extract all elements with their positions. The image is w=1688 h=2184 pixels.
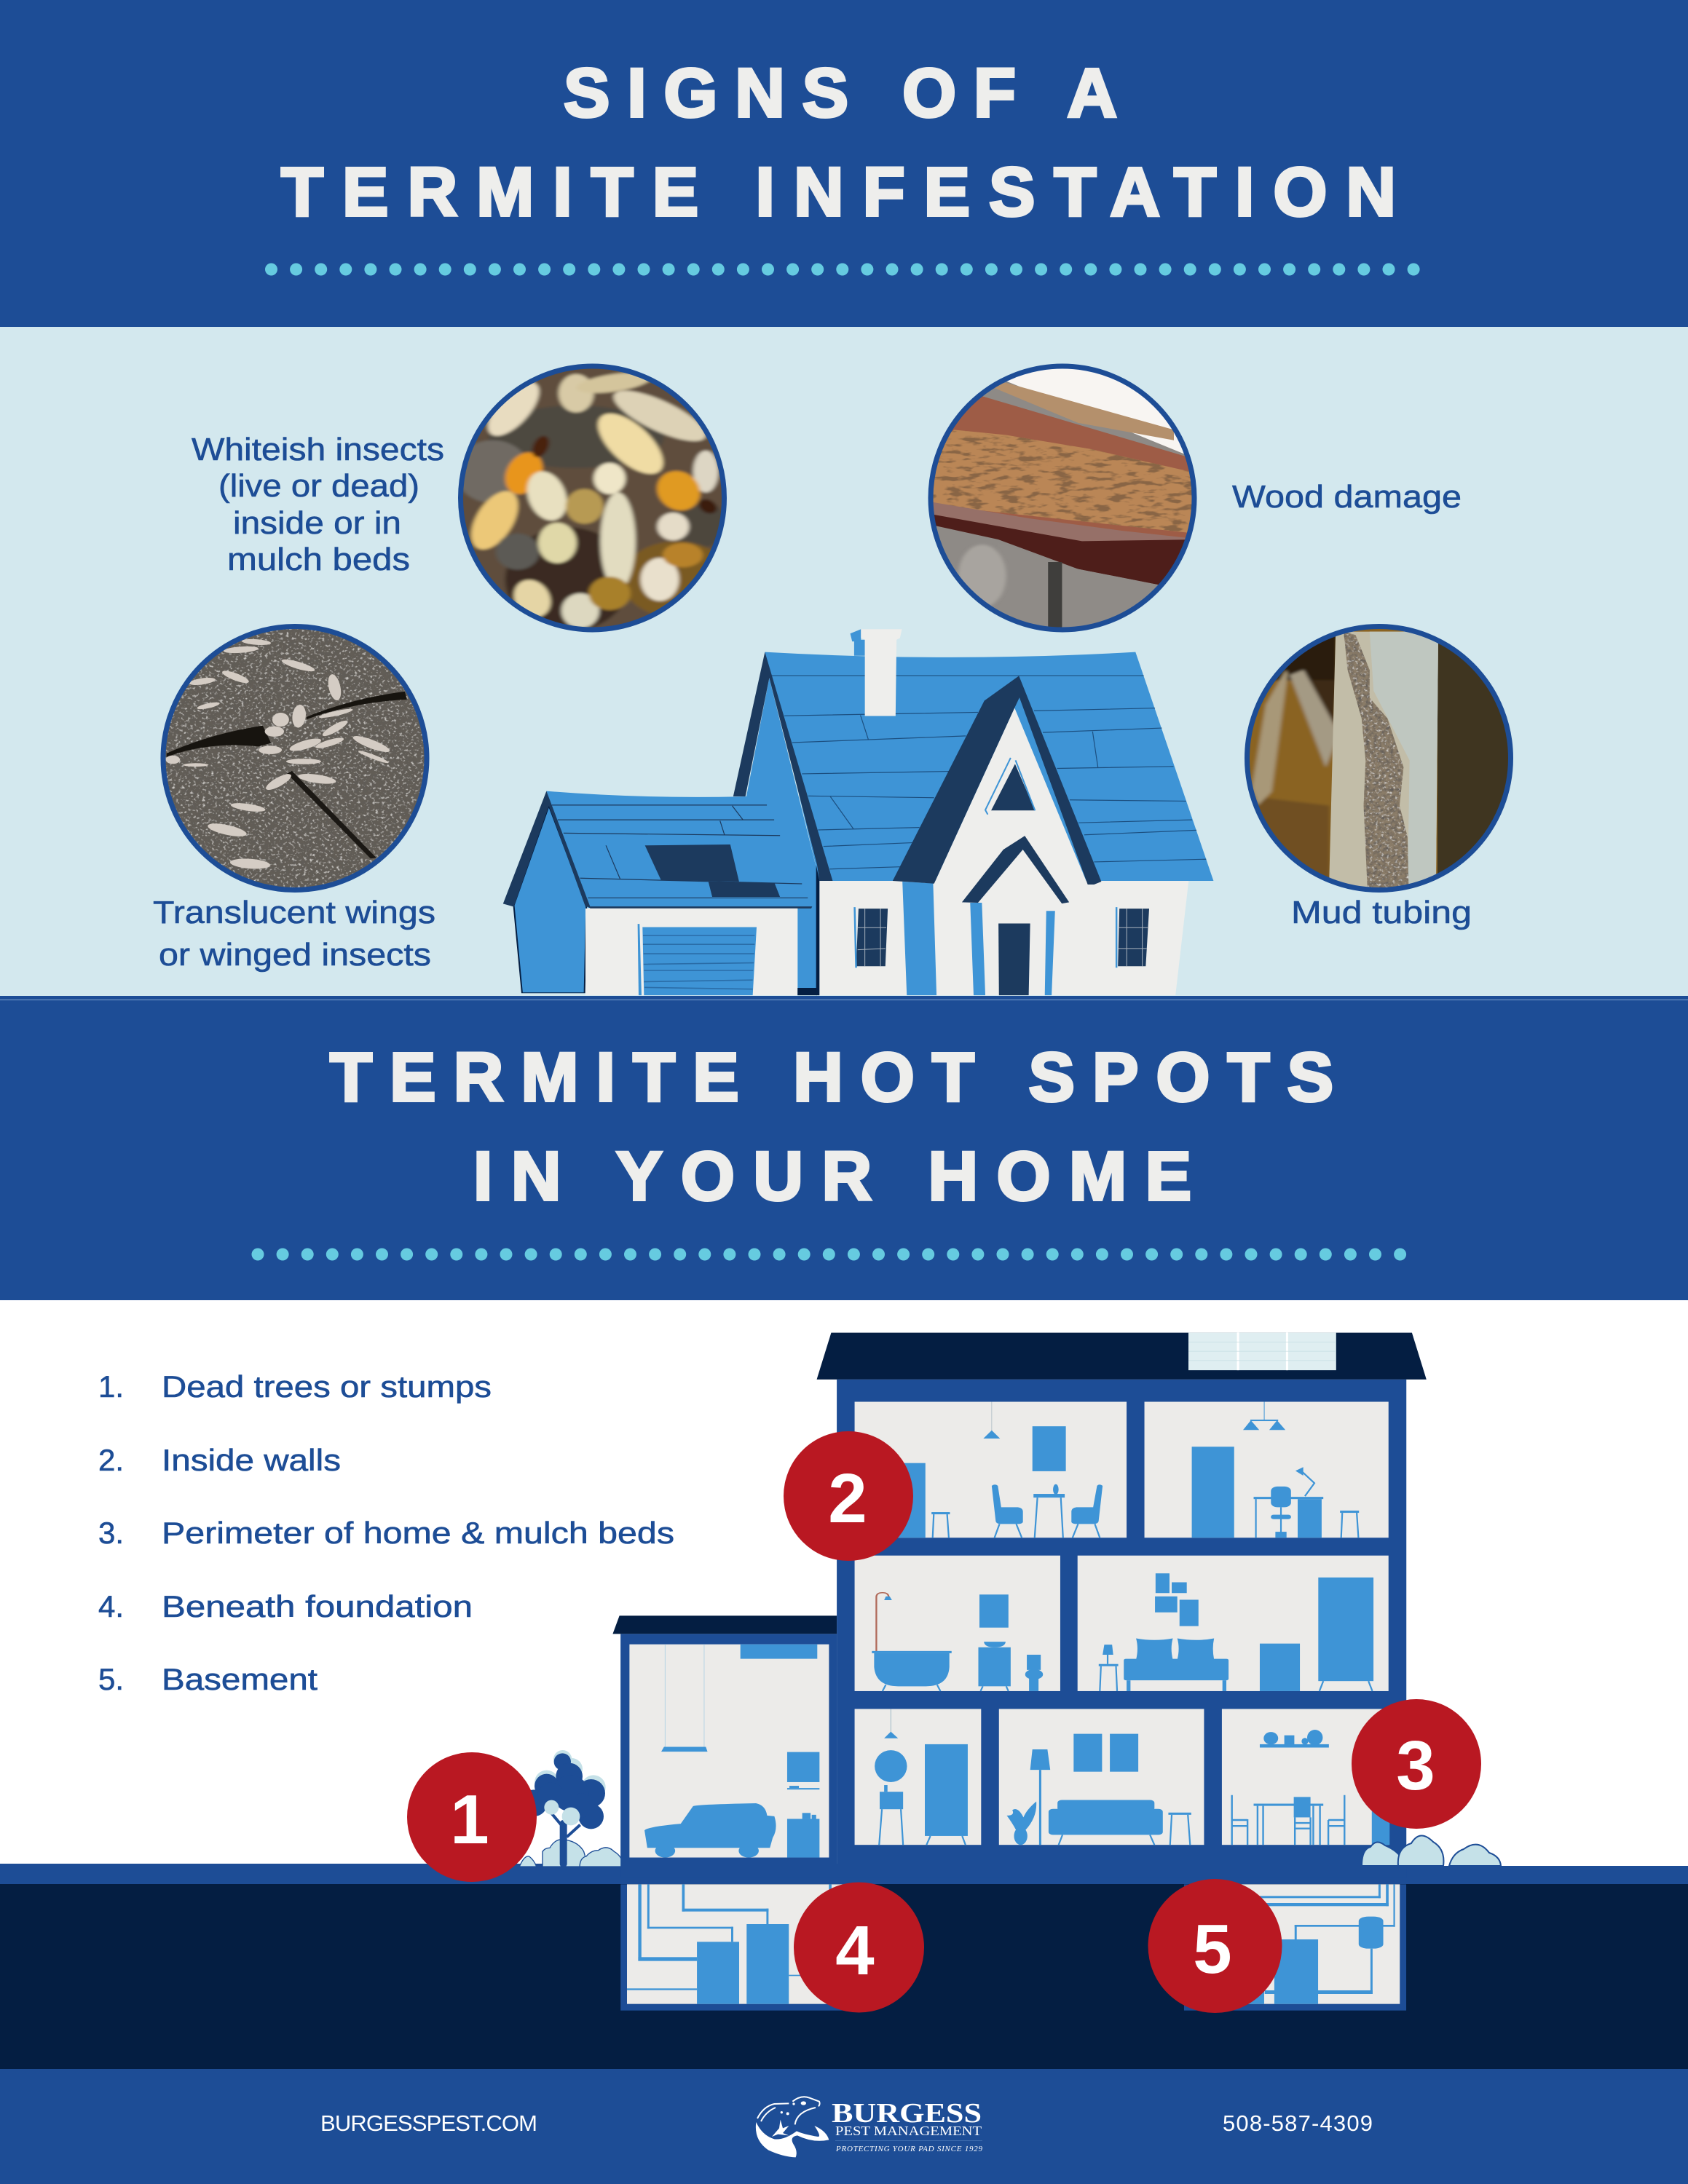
list of hot spots: 1.: [98, 1369, 124, 1404]
garage door: [638, 924, 757, 995]
label: translucent wings: [153, 895, 435, 973]
title: signs of a termite infestation: SIGNS OF A: [564, 55, 1117, 132]
furniture: bathroom: [872, 1593, 1043, 1691]
furniture: office: [1192, 1402, 1359, 1538]
building frame: [620, 1380, 1406, 1878]
furniture: dining room: [898, 1402, 1103, 1538]
photo: whiteish insects: [455, 360, 731, 635]
marker: 3: [1352, 1699, 1481, 1829]
logo: burgess pest management: PROTECTING YOUR PAD SINCE 1929: [835, 2145, 983, 2153]
label: whiteish insects: inside or in: [233, 505, 401, 541]
panel: hot spots area: [0, 1300, 1688, 2069]
logo: burgess pest management: [756, 2097, 983, 2157]
label: whiteish insects: [192, 432, 444, 577]
title: signs of a termite infestation: [281, 55, 1396, 231]
left basement room: [620, 1884, 848, 2011]
phone number: 508-587-4309: [1223, 2110, 1373, 2136]
panel: footer: [0, 2069, 1688, 2184]
right basement room: [1184, 1884, 1406, 2011]
furniture: garage: [644, 1645, 819, 1858]
photo: wood damage: [926, 360, 1202, 635]
label: translucent wings: Translucent wings: [153, 895, 435, 930]
logo: burgess pest management: PEST MANAGEMENT: [835, 2124, 982, 2138]
marker: 1: 1: [450, 1781, 489, 1859]
website: BURGESSPEST.COM: [320, 2110, 537, 2136]
marker: 4: 4: [835, 1912, 875, 1990]
ground underlay: [0, 1883, 1688, 2069]
marker: 5: 5: [1193, 1910, 1232, 1988]
ground band over basement: [620, 1878, 1407, 1884]
marker: 2: 2: [828, 1460, 867, 1538]
garage gable: [514, 806, 586, 993]
list of hot spots: 2.: [98, 1443, 124, 1477]
list of hot spots: Dead trees or stumps: [162, 1369, 492, 1404]
title: signs of a termite infestation: TERMITE INFESTATION: [281, 154, 1396, 231]
garage roof: [612, 1615, 837, 1634]
title: termite hot spots in your home: TERMITE HOT SPOTS: [330, 1039, 1333, 1116]
logo: burgess pest management: BURGESS: [832, 2098, 982, 2129]
dark gable trim: [733, 652, 832, 881]
porch: [962, 836, 1069, 995]
list of hot spots: Basement: [162, 1662, 318, 1696]
title: termite hot spots in your home: [330, 1039, 1333, 1215]
photo: winged insects: [158, 621, 434, 896]
garage wall: [585, 909, 797, 995]
attic window: [985, 758, 1035, 815]
label: wood damage: Wood damage: [1232, 479, 1462, 515]
furniture: kitchen: [1232, 1730, 1389, 1845]
marker: 5: [1148, 1879, 1282, 2013]
furniture: hall: [875, 1709, 968, 1845]
front gable: [934, 708, 1088, 885]
illustration: basement: [620, 1884, 1406, 2011]
dotted divider: [258, 1248, 1403, 1261]
list of hot spots: Perimeter of home & mulch beds: [162, 1516, 674, 1550]
furniture: living room: [1007, 1734, 1191, 1845]
roof patches: [645, 844, 739, 882]
photo: mud tubing: [1242, 621, 1521, 896]
list of hot spots: 5.: [98, 1662, 124, 1696]
marker: 1: [407, 1752, 537, 1882]
illustration: tree and shrubs: [519, 1750, 623, 1867]
label: whiteish insects: (live or dead): [218, 468, 419, 504]
rooms: [629, 1402, 1389, 1858]
list of hot spots: [98, 1369, 674, 1696]
illustration: cross-section building: [612, 1333, 1427, 1878]
marker: 4: [794, 1883, 924, 2012]
windows: [855, 907, 1149, 968]
list of hot spots: Beneath foundation: [162, 1589, 473, 1623]
title: termite hot spots in your home: IN YOUR HOME: [473, 1138, 1191, 1215]
label: mud tubing: Mud tubing: [1291, 895, 1472, 930]
label: whiteish insects: mulch beds: [227, 542, 410, 577]
panel: signs of infestation: [0, 327, 1688, 996]
garage roof and gable wall: [546, 678, 819, 995]
illustration: house: [503, 629, 1213, 995]
chimney: [851, 629, 902, 716]
list of hot spots: Inside walls: [162, 1443, 341, 1477]
label: translucent wings: or winged insects: [159, 937, 431, 973]
illustration: shrubs by main house: [1362, 1835, 1501, 1866]
label: whiteish insects: Whiteish insects: [192, 432, 444, 467]
marker: 3: 3: [1396, 1727, 1435, 1805]
panel: top header: [0, 0, 1688, 327]
main wall: [819, 881, 1188, 995]
dotted divider: [271, 264, 1416, 275]
furniture: bedroom: [1099, 1573, 1373, 1691]
icon: frog: [756, 2097, 829, 2157]
main roof with solar panel: [817, 1333, 1427, 1380]
list of hot spots: 3.: [98, 1516, 124, 1550]
panel: hot spots header: [0, 996, 1688, 1300]
marker: 2: [784, 1431, 913, 1561]
list of hot spots: 4.: [98, 1589, 124, 1623]
main roof: [765, 652, 1213, 881]
